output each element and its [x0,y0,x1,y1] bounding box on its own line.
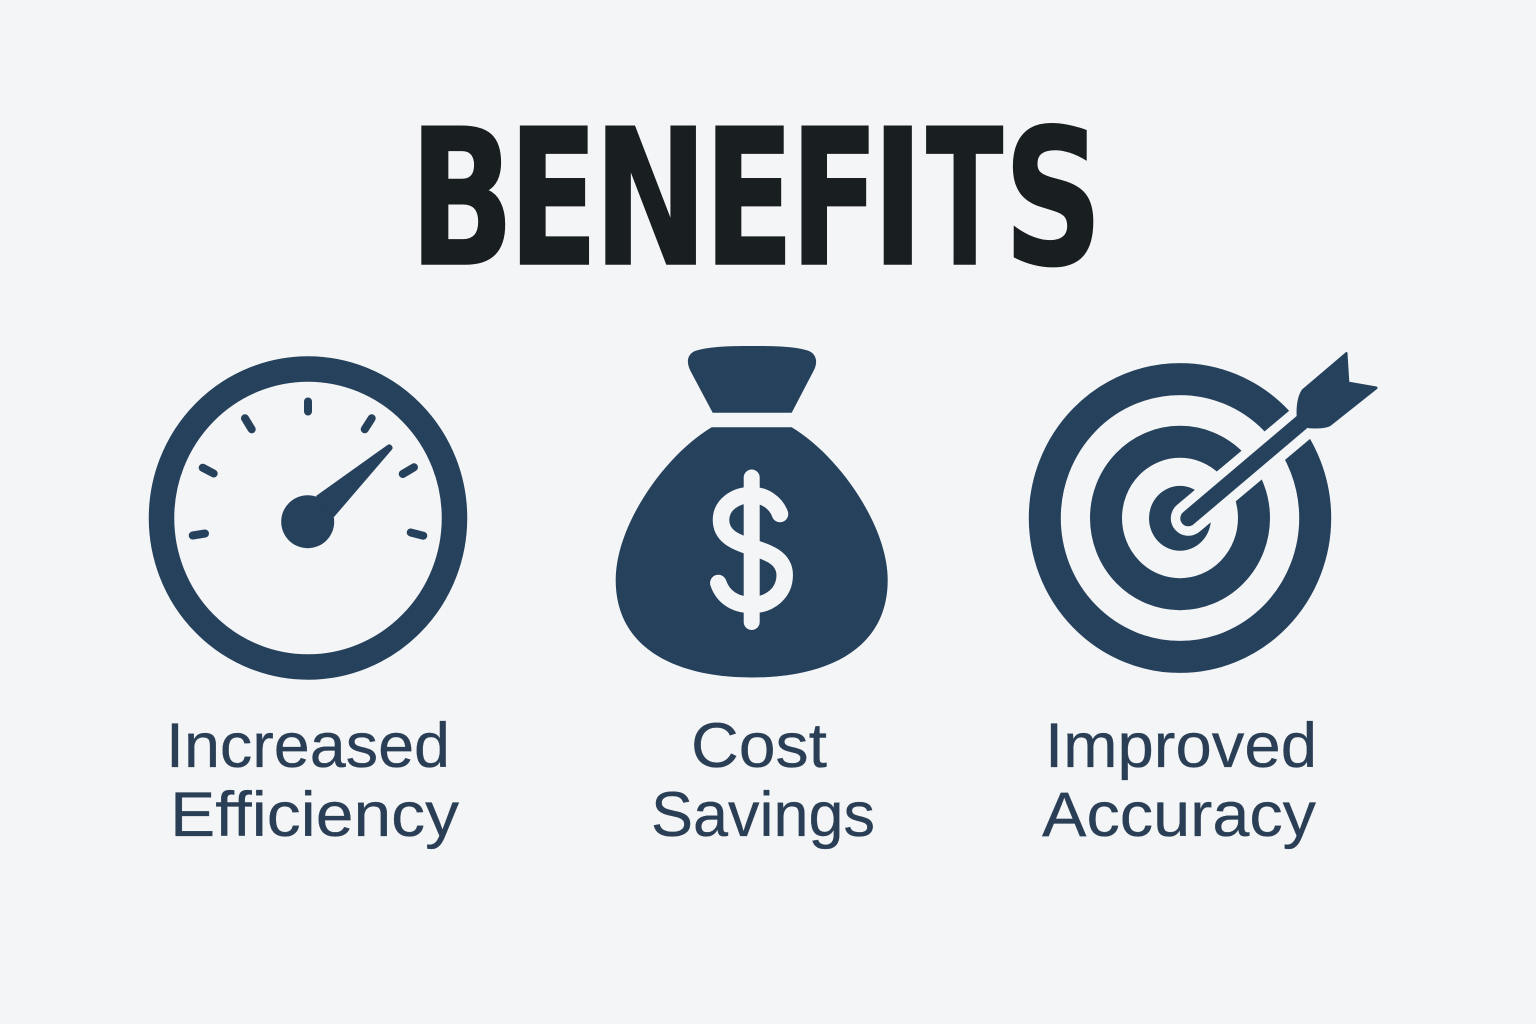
icon: speedometer gauge [162,369,454,667]
dollar sign [718,478,785,622]
label: Increased Efficiency: Efficiency [170,780,460,850]
title: N [593,89,708,309]
label: Increased Efficiency: Increased [166,711,450,781]
arrow [1188,352,1378,518]
title: T [926,88,1003,309]
label: Improved Accuracy: Improved [1045,711,1317,781]
title: F [790,89,879,309]
label: Cost Savings: Cost [691,711,828,781]
label: Improved Accuracy [1042,711,1317,850]
title: S [1004,89,1103,310]
title: E [508,90,598,309]
icon: money bag [616,346,888,678]
title: I [871,88,925,309]
title: B [409,89,514,310]
title [409,88,1103,310]
label: Cost Savings: Savings [651,780,875,850]
icon: target with arrow [1045,352,1378,657]
label: Cost Savings [651,711,875,850]
title: E [704,88,794,309]
label: Increased Efficiency [166,711,460,850]
label: Improved Accuracy: Accuracy [1042,780,1317,850]
